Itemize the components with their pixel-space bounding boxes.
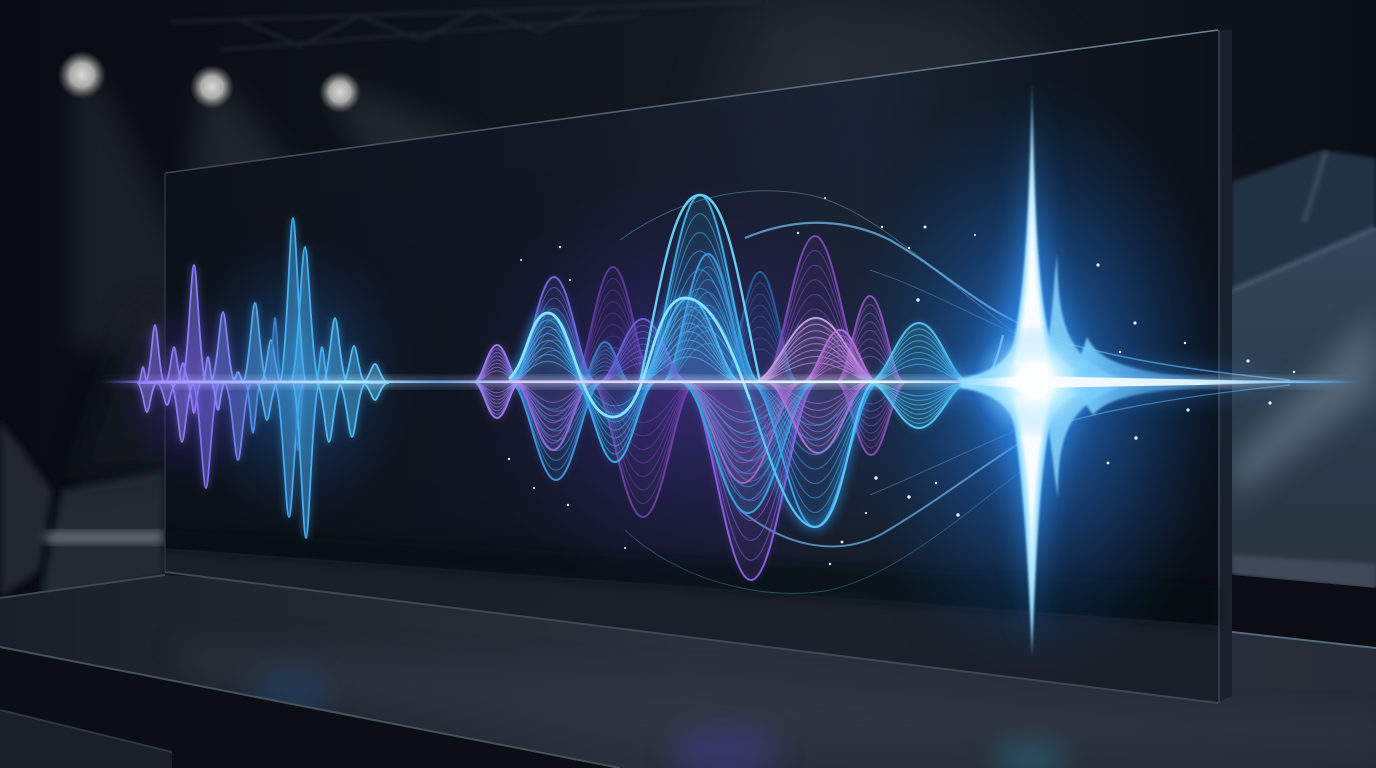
burst: four-point star — [880, 84, 1360, 655]
ambient glow behind waves — [110, 82, 1235, 682]
central waveform: middle layer — [510, 195, 880, 580]
stage spotlights and beams — [58, 51, 480, 350]
central waveform: front layer — [474, 298, 1003, 428]
display panel — [165, 30, 1232, 703]
bright cyan wave stroke — [510, 195, 873, 527]
right background set pieces — [1232, 150, 1376, 648]
left background set pieces — [0, 300, 165, 600]
truss: overhead rigging — [170, 2, 760, 50]
central waveform: back layer — [572, 236, 906, 517]
faint swoosh lines around the burst — [620, 191, 1290, 593]
left waveform: short spikes — [137, 218, 389, 538]
horizontal signal line — [100, 377, 1360, 387]
stage floor — [0, 575, 1376, 768]
floating particles — [508, 197, 1295, 565]
